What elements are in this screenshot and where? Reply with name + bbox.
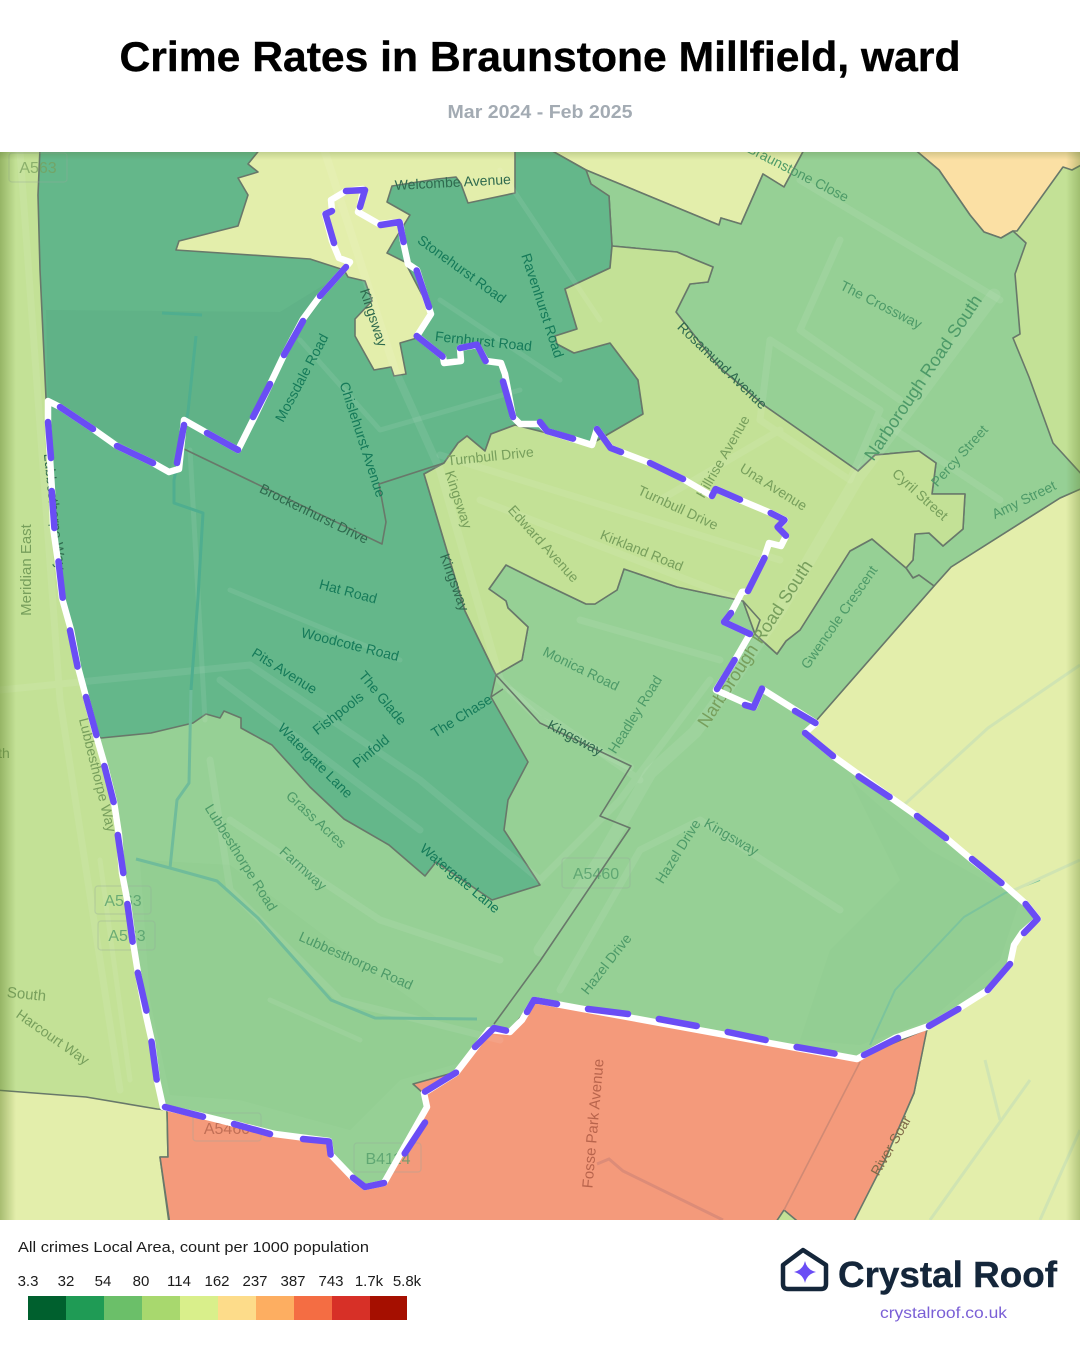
- street labels: Kingsway: [702, 815, 761, 859]
- zone: pale yellow north: [556, 152, 802, 224]
- street labels: Headley Road: [604, 672, 665, 756]
- legend values: 80: [133, 1273, 149, 1290]
- street labels: Rosamund Avenue: [674, 319, 771, 412]
- ward boundary: white line with purple dashes: [48, 189, 1038, 1187]
- shield: B4114: [354, 1143, 421, 1172]
- legend values: 3.3: [18, 1273, 38, 1290]
- darker shading in north-west zone: [46, 275, 340, 470]
- street labels: Mossdale Road: [272, 331, 331, 424]
- brand name: Crystal Roof: [838, 1254, 1058, 1295]
- street labels: Lubbesthorpe Way: [41, 452, 69, 570]
- legend values: 54: [95, 1273, 111, 1290]
- street labels: Chislehurst Avenue: [337, 380, 389, 499]
- stream in south zone: [136, 690, 477, 1019]
- shield: A5460 south: A5460: [204, 1121, 250, 1138]
- shield: A563 west two: [98, 921, 155, 950]
- shield: A5460 south: [193, 1113, 261, 1141]
- street labels: Una Avenue: [737, 460, 810, 514]
- street labels: Cyril Street: [889, 465, 952, 523]
- street labels: Narborough Road South: [693, 556, 816, 731]
- zone: dark green north-west and central: [38, 148, 643, 900]
- legend values: 237: [242, 1273, 268, 1290]
- zone: salmon high-crime south: [160, 1000, 927, 1225]
- street labels: Edward Avenue: [505, 502, 583, 586]
- shield: A563 west one: [95, 886, 151, 914]
- shield: A563 north: A563: [19, 160, 57, 177]
- street labels: Watergate Lane: [275, 720, 356, 801]
- icon: house with star: [783, 1250, 826, 1289]
- legend values: 162: [204, 1273, 230, 1290]
- street labels: Monica Road: [541, 643, 622, 694]
- street labels: Hazel Drive: [652, 816, 704, 886]
- street labels: Kingsway: [442, 468, 476, 530]
- street labels: Pinfold: [349, 731, 392, 771]
- street labels: The Chase: [428, 691, 495, 741]
- zone: light green central: [424, 246, 965, 675]
- zone: medium green north-east: [586, 148, 1080, 586]
- street labels: Woodcote Road: [300, 624, 401, 664]
- legend: [18, 1239, 422, 1320]
- street labels: Fosse Park Avenue: [579, 1058, 608, 1189]
- street labels: Ravenhurst Road: [518, 251, 567, 360]
- stream in dark zone: [162, 313, 203, 690]
- shield: A5460 centre: [562, 858, 630, 888]
- legend values: [18, 1273, 422, 1290]
- zone: pale yellow Kingsway north: [176, 148, 515, 376]
- street labels: Stonehurst Road: [415, 232, 509, 306]
- shield: A563 west two: A563: [108, 928, 146, 945]
- subtitle: date range: Mar 2024 - Feb 2025: [448, 102, 632, 122]
- legend values: 32: [58, 1273, 74, 1290]
- legend values: 5.8k: [393, 1273, 422, 1290]
- labels on dark zone: Welcombe Avenue: [394, 171, 511, 193]
- shield: A5460 centre: A5460: [573, 866, 619, 883]
- title: Crime Rates in Braunstone Millfield, ward: [120, 33, 960, 80]
- street labels: Percy Street: [928, 422, 991, 490]
- street labels: Turnbull Drive: [635, 482, 721, 533]
- legend values: 387: [280, 1273, 306, 1290]
- road in salmon zone: [597, 1159, 723, 1220]
- street labels: Hat Road: [318, 576, 379, 607]
- map vignette: [0, 152, 1080, 1220]
- street labels: Kingsway: [357, 286, 391, 348]
- water courses: [136, 313, 1080, 1220]
- street labels: Gwencole Crescent: [797, 562, 881, 672]
- stream south-east: [870, 880, 1040, 1045]
- shield: A563 west one: A563: [104, 893, 142, 910]
- shield: A563 north: [9, 153, 67, 182]
- street labels: The Glade: [356, 668, 410, 728]
- zone: tan north-east: [913, 148, 1080, 238]
- logo: Crystal Roof: [783, 1250, 1058, 1322]
- street labels: Meridian East: [18, 523, 35, 616]
- zone: pale yellow south-west: [0, 1090, 170, 1230]
- road shields: [9, 153, 630, 1172]
- street labels: South: [6, 984, 47, 1005]
- legend values: 114: [167, 1273, 191, 1290]
- brand url: crystalroof.co.uk: [880, 1305, 1008, 1322]
- street labels: River Soar: [867, 1113, 914, 1178]
- legend values: 1.7k: [355, 1273, 384, 1290]
- internal boundaries: [184, 449, 860, 1210]
- street labels: [0, 140, 1059, 1189]
- street labels: Lubbesthorpe Way: [76, 716, 120, 833]
- street labels: Fernhurst Road: [434, 328, 533, 354]
- zone: medium green south, ward interior: [96, 539, 1037, 1187]
- street labels: Harcourt Way: [13, 1006, 92, 1068]
- street labels: Hazel Drive: [577, 930, 635, 997]
- zone: pale yellow south-east: [805, 489, 1080, 1230]
- street labels: Farmway: [277, 843, 330, 893]
- street labels: Lubbesthorpe Road: [297, 928, 415, 993]
- street labels: Kingsway: [437, 551, 472, 613]
- park shading in south zone: [140, 780, 1020, 1130]
- street labels: Pits Avenue: [249, 644, 320, 697]
- street labels: Kingsway: [545, 716, 606, 759]
- map base: light green area: [0, 152, 1080, 1220]
- labels on medium and light zones: Braunstone Close: [745, 140, 852, 205]
- street labels: Lubbesthorpe Road: [202, 801, 281, 914]
- street labels: Fishpools: [309, 688, 366, 738]
- street labels: The Crossway: [838, 277, 925, 332]
- street labels: Brockenhurst Drive: [257, 480, 371, 547]
- legend title: All crimes Local Area, count per 1000 population: [18, 1239, 369, 1256]
- legend colour scale: [28, 1296, 407, 1320]
- street labels: Kirkland Road: [598, 526, 686, 574]
- street labels: Hillrise Avenue: [693, 412, 753, 500]
- street labels: Watergate Lane: [417, 840, 503, 916]
- street labels: Grass Acres: [283, 787, 350, 851]
- canal lines on pale zones: [905, 665, 1080, 1220]
- street labels: Narborough Road South: [860, 291, 986, 464]
- shield: B4114: B4114: [365, 1151, 411, 1168]
- legend values: 743: [318, 1273, 344, 1290]
- street labels: Amy Street: [989, 477, 1059, 522]
- street labels: Turnbull Drive: [447, 444, 535, 469]
- road network: [84, 188, 1000, 1044]
